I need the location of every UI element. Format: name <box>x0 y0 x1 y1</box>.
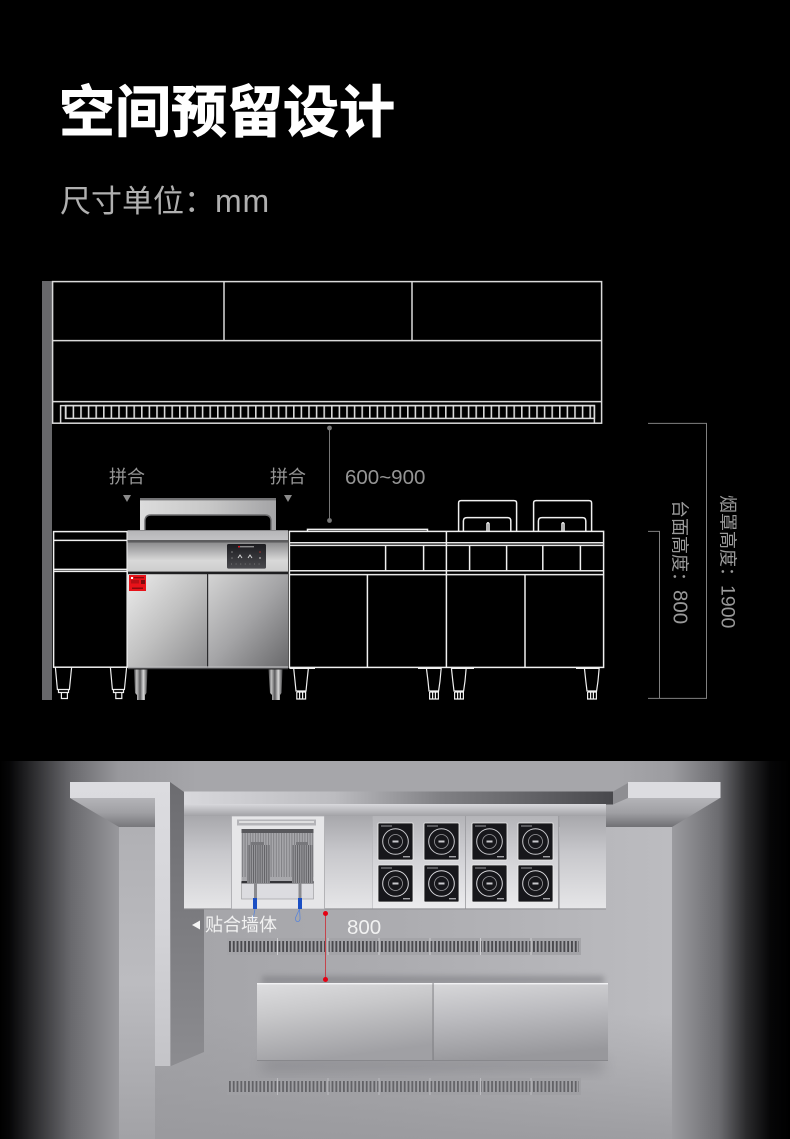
wall side face <box>170 782 204 1066</box>
cooktop 1 <box>378 823 413 860</box>
cooktop 3 <box>472 823 507 860</box>
dimension: 600~900 clearance: 600~900 <box>345 466 425 489</box>
counter legs <box>289 667 315 699</box>
island back shadow <box>262 976 604 984</box>
griddle plate <box>308 529 428 531</box>
cooktop 2 <box>424 823 459 860</box>
top view scene <box>0 761 790 1139</box>
fryer handle right <box>534 501 592 531</box>
outline: griddle and fryer counter <box>289 501 604 699</box>
fryer basket left <box>247 842 270 899</box>
label: join left <box>109 467 145 502</box>
cooktop 4 <box>518 823 553 860</box>
left cabinet leg B <box>110 668 127 698</box>
outline: exhaust hood <box>53 282 602 423</box>
left column face <box>119 827 155 1139</box>
back equipment row <box>184 816 606 909</box>
cooktop 6 <box>424 865 459 902</box>
control panel <box>227 544 266 569</box>
right soffit <box>606 798 720 827</box>
floor bottom fade <box>119 827 672 1139</box>
fryer basket right <box>292 842 313 899</box>
left cabinet leg A <box>55 668 72 698</box>
induction cooktops <box>378 823 553 902</box>
title: 空间预留设计 <box>59 81 395 144</box>
subtitle: units: 尺寸单位：mm <box>60 183 270 219</box>
label: join left: 拼合 <box>109 467 145 487</box>
dimension: 800 aisle: 800 <box>347 916 381 939</box>
dimension: 600~900 clearance <box>327 426 425 523</box>
machine backsplash <box>140 498 276 530</box>
floor drain grille lower <box>227 1078 581 1095</box>
machine top strip <box>128 530 288 541</box>
centre machine <box>128 498 288 700</box>
dimension bracket: hood height <box>648 423 738 698</box>
left soffit <box>70 798 155 827</box>
hood top view <box>184 782 720 816</box>
red warning sticker <box>129 575 146 591</box>
machine body panel <box>128 542 288 572</box>
machine legs <box>134 670 148 700</box>
island counter <box>257 983 608 1061</box>
fryer blue handles <box>253 898 302 922</box>
scene background with dark edges <box>0 761 790 1139</box>
label: join right <box>270 467 306 502</box>
dimension: 800 aisle <box>323 911 381 982</box>
fryer <box>232 816 324 922</box>
island shadow <box>262 1058 604 1072</box>
dimension bracket: hood height: 烟罩高度： 1900 <box>716 495 738 629</box>
floor <box>119 827 672 1139</box>
label: against the wall: 贴合墙体 <box>205 915 277 935</box>
outline: left cabinet <box>54 532 127 698</box>
floor drain grille upper <box>227 938 581 955</box>
machine doors <box>128 574 207 668</box>
L-shaped wall top <box>70 782 170 1066</box>
dimension label: counter height: 台面高度： 800 <box>668 500 692 624</box>
label: join right: 拼合 <box>270 467 306 487</box>
cooktop 5 <box>378 865 413 902</box>
cooktop 8 <box>518 865 553 902</box>
wall bar <box>42 281 52 700</box>
cooktop 7 <box>472 865 507 902</box>
elevation drawing <box>42 281 738 700</box>
fryer handle left <box>459 501 517 531</box>
